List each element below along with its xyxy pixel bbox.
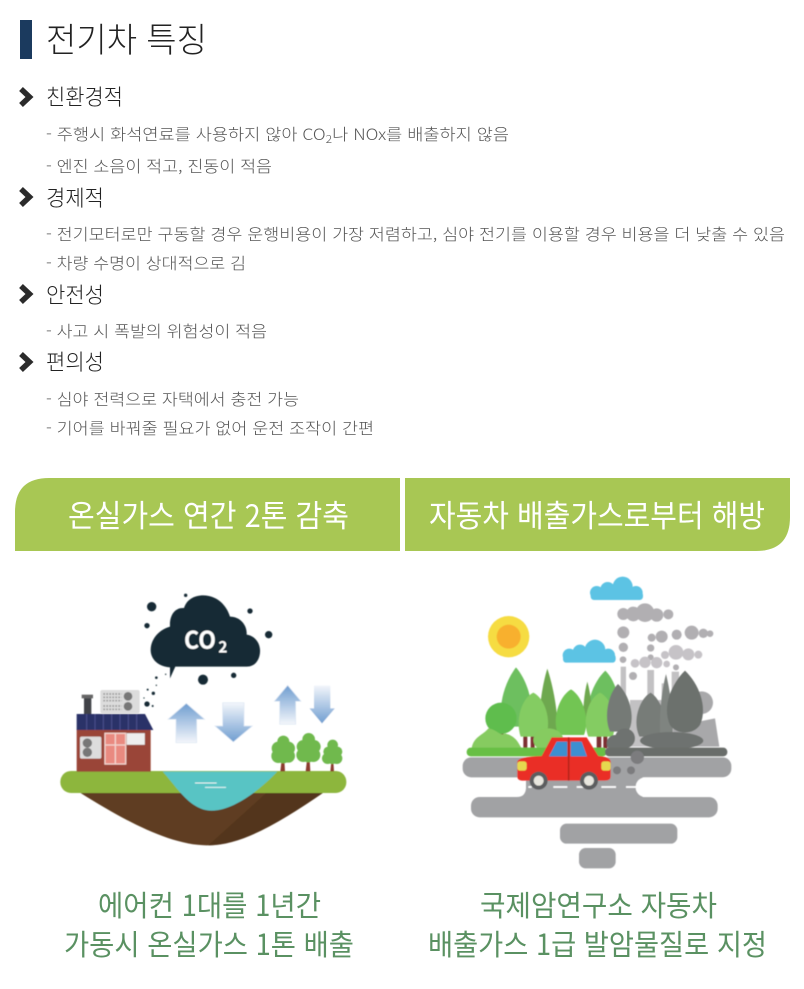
heading: economic: 경제적 xyxy=(46,181,104,213)
soil xyxy=(80,793,323,845)
title accent bar xyxy=(20,20,32,59)
arrow up large xyxy=(168,703,205,743)
banner text left: 온실가스 연간 2톤 감축 xyxy=(68,491,349,536)
text: eco line 1: 나 NOx를 배출하지 않음 xyxy=(332,121,509,145)
car xyxy=(517,737,611,790)
arrow up small xyxy=(274,685,301,724)
heading: eco-friendly: 친환경적 xyxy=(46,80,123,112)
icon: chevron xyxy=(21,189,30,205)
house xyxy=(77,690,153,772)
text: convenience line 2: - 기어를 바꿔줄 필요가 없어 운전 조작이 간편 xyxy=(46,415,374,439)
arrow down small xyxy=(309,685,336,724)
caption right: 배출가스 1급 발암물질로 지정 xyxy=(428,922,767,964)
caption right: 국제암연구소 자동차 xyxy=(480,883,717,925)
section: eco-friendly xyxy=(21,80,509,177)
pollution dots xyxy=(143,594,272,707)
sun xyxy=(488,616,529,657)
CO2 cloud: CO xyxy=(184,622,216,656)
grey forest xyxy=(605,671,727,756)
text: economic line 1: - 전기모터로만 구동할 경우 운행비용이 가장 저렴하고, 심야 전기를 이용할 경우 비용을 더 낮출 수 있음 xyxy=(46,221,785,245)
arrow down large xyxy=(215,703,252,742)
road notch xyxy=(636,777,746,797)
trees xyxy=(271,733,342,771)
CO2 cloud: 2 xyxy=(218,635,227,657)
text: eco line 1: 2 xyxy=(326,131,332,147)
caption left xyxy=(64,883,354,964)
text: eco line 2: - 엔진 소음이 적고, 진동이 적음 xyxy=(46,153,272,177)
icon: chevron xyxy=(21,354,30,370)
banner: greenhouse gas xyxy=(15,478,400,551)
banner: exhaust gas xyxy=(405,478,790,551)
icon: chevron xyxy=(21,286,30,302)
factory xyxy=(621,667,719,747)
illustration: road forest factory xyxy=(463,577,746,868)
section: safety xyxy=(21,278,267,342)
smoke xyxy=(617,603,713,680)
text: eco line 1: - 주행시 화석연료를 사용하지 않아 CO xyxy=(46,121,301,145)
section: convenience xyxy=(21,345,374,439)
road xyxy=(463,757,731,868)
icon: chevron xyxy=(21,89,30,105)
exhaust puffs xyxy=(613,751,644,774)
text: safety line: - 사고 시 폭발의 위험성이 적음 xyxy=(46,318,267,342)
section: economic xyxy=(21,181,785,274)
green forest xyxy=(467,667,619,756)
banner text right: 자동차 배출가스로부터 해방 xyxy=(429,491,765,536)
clouds xyxy=(563,577,643,663)
grass xyxy=(60,771,346,793)
heading: safety: 안전성 xyxy=(46,278,104,310)
text: convenience line 1: - 심야 전력으로 자택에서 충전 가능 xyxy=(46,386,299,410)
illustration: CO2 island xyxy=(60,594,346,845)
heading: convenience: 편의성 xyxy=(46,345,104,377)
caption left: 에어컨 1대를 1년간 xyxy=(98,883,321,925)
road dashes xyxy=(528,784,636,789)
caption right xyxy=(428,883,767,964)
CO2 cloud xyxy=(151,595,260,678)
water xyxy=(163,772,277,811)
title: 전기차 특징 xyxy=(46,13,207,62)
caption left: 가동시 온실가스 1톤 배출 xyxy=(64,922,354,964)
text: economic line 2: - 차량 수명이 상대적으로 김 xyxy=(46,250,246,274)
